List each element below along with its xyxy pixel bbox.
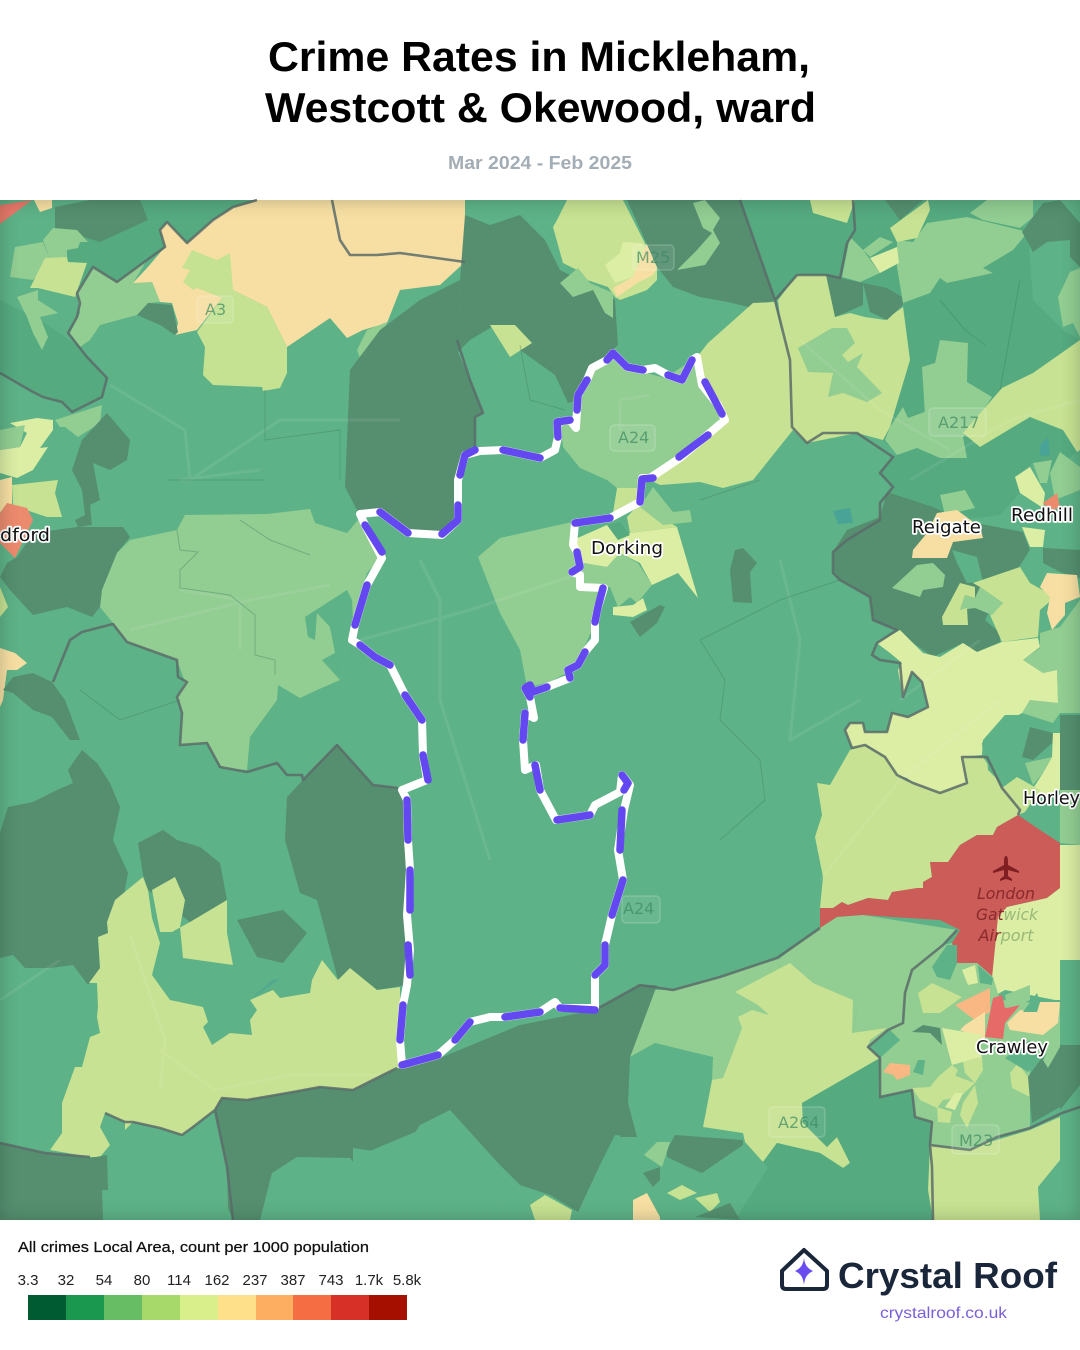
title: Crime Rates in Mickleham, [268, 33, 810, 80]
airport label: London [977, 884, 1035, 903]
district boundary lines [0, 200, 1080, 1220]
map [0, 200, 1080, 1220]
road shields: A3 [205, 300, 226, 319]
road shields [197, 245, 999, 1154]
water bodies [252, 437, 1050, 998]
legend scale values: 114 [167, 1272, 191, 1289]
place labels: dford [0, 525, 50, 546]
map regions: crime rate choropleth [0, 200, 1080, 1220]
Crawley area cells [868, 943, 1060, 1150]
Reigate area [833, 492, 1030, 657]
map edge shadow [0, 200, 1080, 1220]
ward interior light green and Dorking cells [478, 522, 600, 687]
dark block west of ward [345, 280, 483, 535]
Gatwick airport, high crime [820, 815, 1060, 977]
M25 pale cluster [553, 200, 657, 300]
road shields: M23 [959, 1131, 993, 1150]
legend colour bar [28, 1295, 407, 1320]
place labels [0, 505, 1080, 1058]
subtitle: date range: Mar 2024 - Feb 2025 [448, 153, 632, 173]
local boundary lines [80, 280, 1020, 840]
road shields: A264 [778, 1113, 819, 1132]
airport label [976, 884, 1039, 945]
legend scale values: 3.3 [18, 1272, 38, 1289]
place labels: Reigate [912, 517, 981, 538]
road shields: A217 [938, 413, 979, 432]
logo icon: house with star [782, 1250, 827, 1289]
legend scale values: 237 [242, 1272, 268, 1289]
logo wordmark: Crystal Roof [838, 1255, 1058, 1296]
road shields: A24 [623, 899, 654, 918]
western light green area [100, 509, 383, 770]
title: Westcott & Okewood, ward [265, 84, 816, 131]
airport label: Gatwick [976, 905, 1039, 924]
legend scale values: 54 [96, 1272, 112, 1289]
place labels: Crawley [976, 1037, 1048, 1058]
right map tile strip [1060, 715, 1080, 790]
road shields: A24 [618, 428, 649, 447]
dark block north of ward [458, 215, 618, 403]
legend scale values: 1.7k [355, 1272, 384, 1289]
Guildford cells [0, 503, 33, 558]
legend scale values: 162 [204, 1272, 230, 1289]
legend scale values: 80 [134, 1272, 150, 1289]
place labels: Redhill [1011, 505, 1073, 526]
legend scale values: 32 [58, 1272, 74, 1289]
southern dark band [0, 1143, 108, 1220]
dark block north east of ward [627, 200, 775, 308]
pale area north of Gatwick [845, 630, 1058, 793]
ward boundary: white line with purple dashes [352, 353, 725, 1065]
legend title: All crimes Local Area, count per 1000 population [18, 1239, 369, 1256]
legend scale values: 5.8k [393, 1272, 422, 1289]
dark blocks south-west [0, 750, 128, 985]
title [265, 33, 816, 131]
website url: crystalroof.co.uk [880, 1305, 1008, 1322]
airport label: Airport [977, 926, 1034, 945]
faint road lines [0, 340, 1080, 1090]
legend scale values [18, 1272, 422, 1289]
place labels: Horley [1023, 788, 1080, 809]
north-east pale area [650, 302, 793, 488]
legend scale values: 387 [280, 1272, 306, 1289]
upper-left tan area [133, 200, 465, 347]
legend scale values: 743 [318, 1272, 344, 1289]
airport plane icon [993, 856, 1019, 881]
south-east regions [630, 958, 887, 1142]
top-left corner cells [0, 200, 32, 224]
bottom centre cells [633, 1193, 660, 1220]
place labels: Dorking [591, 538, 663, 559]
road shields: M25 [636, 248, 670, 267]
southern pale band [50, 877, 400, 1157]
north ward light green [560, 352, 725, 488]
